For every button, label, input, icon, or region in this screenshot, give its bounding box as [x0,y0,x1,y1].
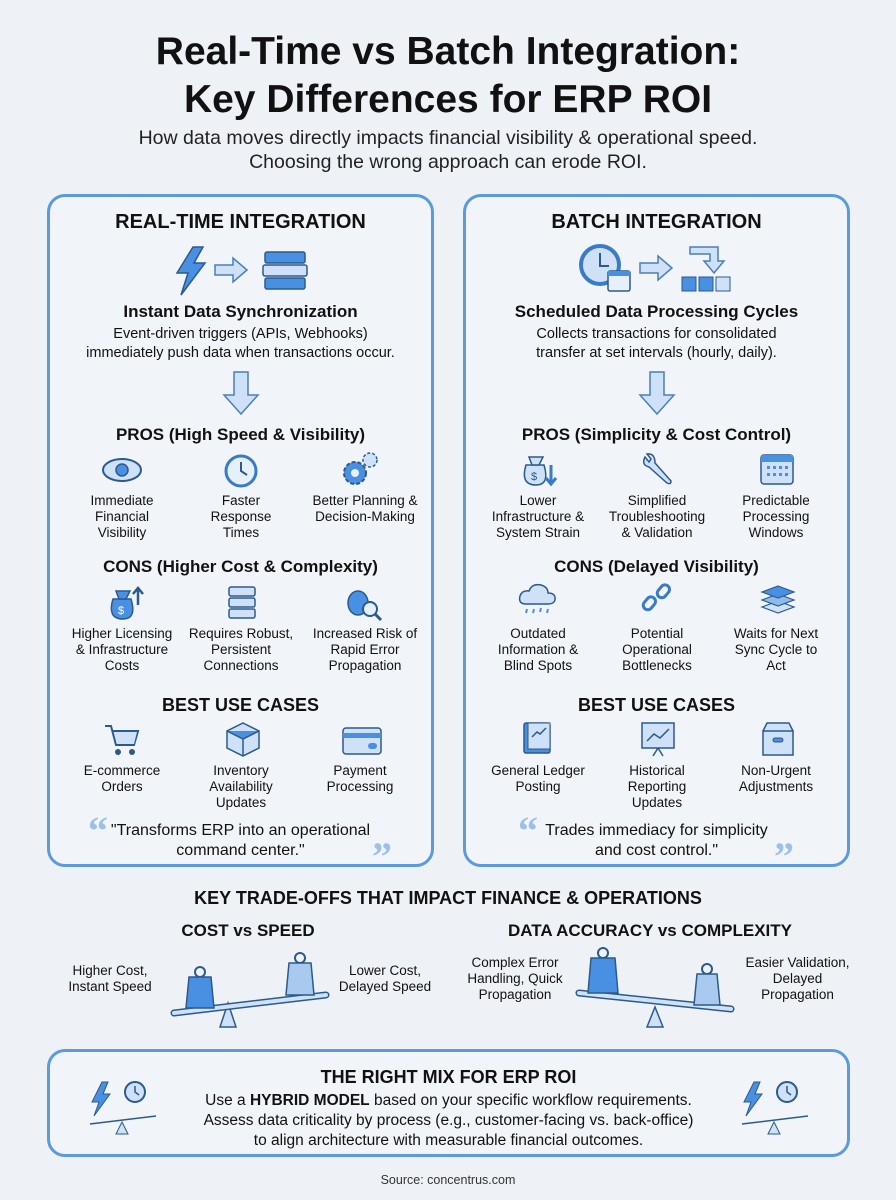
bottom title: THE RIGHT MIX FOR ERP ROI [321,1067,576,1087]
labels: cons: Outdated [510,626,566,641]
panel: batch: Sync Cycle to [735,642,817,657]
heading: BATCH INTEGRATION [551,211,762,233]
arrow down [222,371,260,415]
icon: balance right [742,1081,808,1134]
icon: clock to folders [579,244,730,292]
labels: cons: Information & [498,642,578,657]
bottom text: to align architecture with measurable financial outcomes. [254,1132,643,1149]
source: Source: concentrus.com [381,1173,515,1187]
heading: REAL-TIME INTEGRATION [115,211,366,233]
labels: pros: System Strain [496,525,580,540]
panel: batch: Adjustments [739,779,813,794]
seesaw: accuracy vs complexity: Delayed [773,971,822,986]
seesaw: accuracy vs complexity [467,947,850,1028]
cons heading: CONS (Higher Cost & Complexity) [103,557,378,576]
subheading: accuracy vs complexity: DATA ACCURACY vs COMPLEXITY [508,921,792,940]
panel: real-time: Persistent [211,642,271,657]
seesaw: accuracy vs complexity: Complex Error [471,955,559,970]
bottom text: Use a HYBRID MODEL based on your specific workflow requirements. [205,1092,692,1109]
icons: use cases [105,725,140,755]
labels: use cases: General Ledger [491,763,585,778]
labels: pros [492,493,584,540]
quote: “ [518,808,538,853]
subtitle: How data moves directly impacts financial visibility & operational speed. [139,127,757,149]
panel: real-time: Payment [333,763,387,778]
labels: use cases [84,763,160,794]
labels: pros: Infrastructure & [492,509,584,524]
panel: batch: Act [766,658,786,673]
subheading: cost vs speed: COST vs SPEED [181,921,315,940]
seesaw: accuracy vs complexity: Handling, Quick [467,971,563,986]
panel: real-time: Requires Robust, [189,626,293,641]
best use heading: BEST USE CASES [578,695,735,715]
panel: batch: Waits for Next [734,626,818,641]
labels: use cases: Orders [101,779,143,794]
panel: real-time: Decision-Making [315,509,415,524]
labels: pros [90,493,154,540]
subtitle [139,127,757,173]
icons: pros [102,458,142,482]
panel: batch: Reporting [628,779,686,794]
quote: “ [88,808,108,853]
panel: batch: Updates [632,795,682,810]
bottom text: Assess data criticality by process (e.g., customer-facing vs. back-office) [204,1112,693,1129]
icon: balance left [90,1081,156,1134]
description: Collects transactions for consolidated [536,326,777,342]
seesaw: accuracy vs complexity: Propagation [761,987,834,1002]
subheading: Scheduled Data Processing Cycles [515,302,798,321]
labels: use cases: E-commerce [84,763,160,778]
panel: batch: ” [774,834,794,879]
panel: right mix [47,1049,850,1157]
seesaw: accuracy vs complexity: Easier Validation, [745,955,850,970]
labels: cons: Blind Spots [504,658,572,673]
subheading: Instant Data Synchronization [123,302,358,321]
labels: cons [498,626,578,673]
icons: cons [518,584,556,614]
icons: pros: $ [531,471,537,483]
labels: pros: Financial [95,509,149,524]
icons: use cases [523,722,551,754]
panel: real-time: Updates [216,795,266,810]
seesaw: cost vs speed: Instant Speed [68,979,152,994]
title [156,30,740,121]
panel: real-time: Connections [203,658,279,673]
panel: batch: Simplified [628,493,686,508]
heading: trade-offs: KEY TRADE-OFFS THAT IMPACT FINANCE & OPERATIONS [194,888,702,908]
panel: real-time: Availability [209,779,273,794]
panel: real-time: command center." [176,842,305,859]
seesaw: cost vs speed: Delayed Speed [339,979,431,994]
panel: real-time: ” [372,834,392,879]
labels: cons [72,626,172,673]
icons: pros [524,456,558,486]
description: transfer at set intervals (hourly, daily). [536,345,777,361]
labels: pros: Lower [520,493,556,508]
panel: batch: Troubleshooting [609,509,705,524]
labels: use cases: Posting [515,779,561,794]
seesaw: cost vs speed: Lower Cost, [349,963,421,978]
panel: real-time: "Transforms ERP into an operational [111,822,370,839]
title: Key Differences for ERP ROI [184,78,712,121]
icons: cons: $ [118,605,124,617]
seesaw: cost vs speed [68,952,431,1028]
panel: batch: Predictable [742,493,810,508]
icon: bolt to server [176,246,308,296]
panel: real-time: Inventory [213,763,269,778]
panel: batch: and cost control." [595,842,718,859]
description [536,326,777,361]
best use heading: BEST USE CASES [162,695,319,715]
panel: batch: Trades immediacy for simplicity [545,822,768,839]
panel: real-time: Processing [327,779,393,794]
panel: real-time: Response [211,509,271,524]
labels: use cases [491,763,585,794]
panel: batch: Non-Urgent [741,763,811,778]
panel: real-time [47,194,434,867]
seesaw: cost vs speed: Higher Cost, [72,963,148,978]
pros heading: PROS (High Speed & Visibility) [116,425,365,444]
labels: pros: Immediate [90,493,154,508]
labels: cons: Costs [105,658,139,673]
title: Real-Time vs Batch Integration: [156,30,740,73]
description [86,326,395,361]
icons: cons [110,586,144,620]
panel: real-time: Rapid Error [330,642,400,657]
subtitle: Choosing the wrong approach can erode ROI. [249,151,647,173]
cons heading: CONS (Delayed Visibility) [554,557,759,576]
panel: real-time: Propagation [329,658,401,673]
labels: cons: & Infrastructure [76,642,168,657]
panel: real-time: Increased Risk of [313,626,417,641]
panel: batch: Historical [629,763,685,778]
panel: real-time: Better Planning & [312,493,418,508]
panel: real-time: Times [223,525,259,540]
panel: batch [463,194,850,867]
labels: pros: Visibility [98,525,146,540]
panel: batch: Windows [749,525,803,540]
panel: batch: Operational [622,642,692,657]
panel: batch: & Validation [621,525,693,540]
panel: real-time: Faster [222,493,260,508]
seesaw: accuracy vs complexity: Propagation [479,987,551,1002]
bottom text [204,1092,693,1149]
pros heading: PROS (Simplicity & Cost Control) [522,425,791,444]
panel: batch: Processing [743,509,809,524]
panel: batch: Bottlenecks [622,658,692,673]
arrow down [638,371,676,415]
description: immediately push data when transactions occur. [86,345,395,361]
labels: cons: Higher Licensing [72,626,172,641]
panel: batch: Potential [631,626,683,641]
description: Event-driven triggers (APIs, Webhooks) [113,326,368,342]
